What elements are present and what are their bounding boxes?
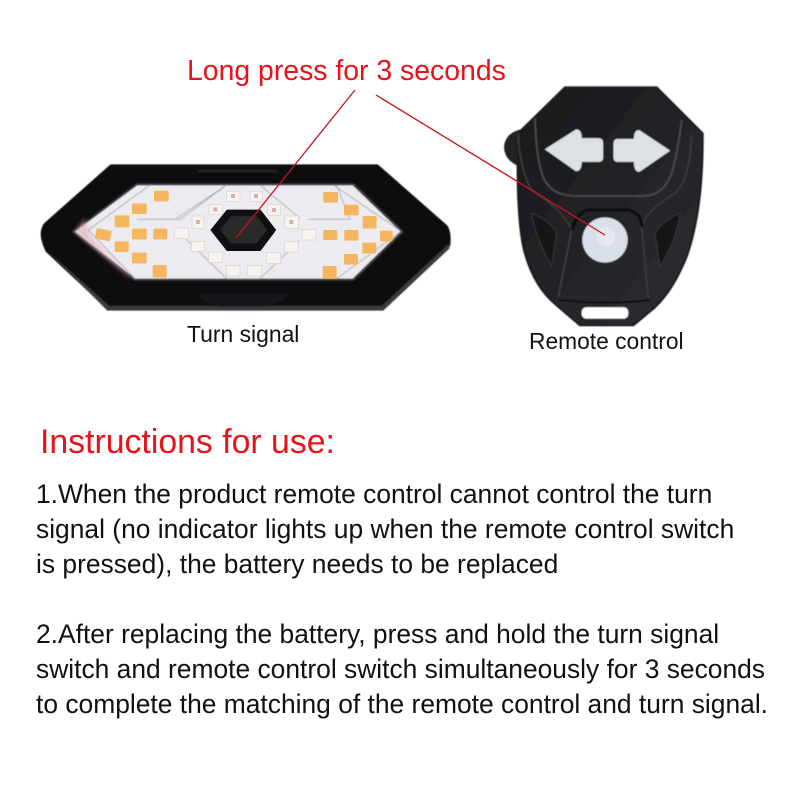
callout: long press: Long press for 3 seconds bbox=[187, 55, 506, 87]
right arrow button bbox=[614, 131, 669, 171]
text block: step 2: switch and remote control switch simultaneously for 3 seconds bbox=[36, 654, 765, 684]
lanyard slot bbox=[582, 307, 628, 319]
round switch bbox=[582, 217, 628, 263]
text block: step 1 bbox=[36, 479, 734, 579]
icon: remote control bbox=[504, 87, 703, 325]
label: remote control: Remote control bbox=[529, 328, 684, 354]
left arrow button bbox=[546, 130, 603, 171]
leader lines bbox=[236, 90, 605, 238]
text block: step 2 bbox=[36, 619, 768, 719]
text block: step 1: signal (no indicator lights up when the remote control switch bbox=[36, 514, 734, 544]
label: turn signal: Turn signal bbox=[187, 321, 299, 347]
center button bbox=[212, 211, 275, 250]
orange LEDs bbox=[95, 191, 393, 279]
text block: step 2: to complete the matching of the remote control and turn signal. bbox=[36, 689, 768, 719]
white and red LEDs bbox=[174, 191, 316, 276]
heading: instructions: Instructions for use: bbox=[40, 423, 335, 461]
text block: step 2: 2.After replacing the battery, press and hold the turn signal bbox=[36, 619, 719, 649]
icon: turn signal light bbox=[44, 167, 449, 311]
text block: step 1: is pressed), the battery needs to be replaced bbox=[36, 549, 558, 579]
text block: step 1: 1.When the product remote control cannot control the turn bbox=[36, 479, 712, 509]
